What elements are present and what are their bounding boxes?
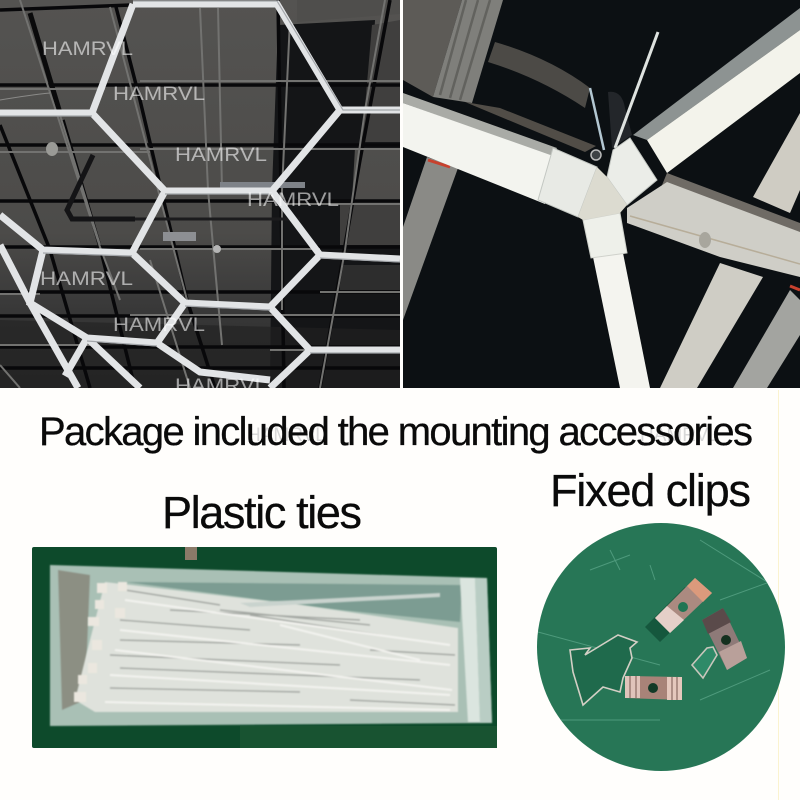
label: fixed clips: Fixed clips [550,465,751,516]
heading: package contents: Package included the mounting accessories [39,410,753,454]
steel studs [433,0,503,103]
decorative edge line [778,390,779,800]
photo: fixed clips on green mat [537,523,785,771]
plastic bag [50,565,492,726]
faint ghost watermarks behind heading: HAMRVL [640,425,719,446]
faint ghost watermarks behind heading [247,425,719,446]
watermarks: HAMRVL [113,314,205,336]
watermarks: HAMRVL [42,38,133,60]
white hexagon tube network [0,4,400,388]
bottom tube [593,253,650,388]
photo: close-up of Y connector joint [403,0,800,388]
light background beams [660,263,763,388]
grey background panel and curved beam [403,0,462,97]
clip: right copper [702,608,747,670]
main horizontal beam [660,173,800,235]
watermarks: HAMRVL [40,268,133,290]
clip: top copper [645,578,712,642]
photo: bag of plastic ties [32,547,497,748]
photo: hexagon lights on ceiling grid [0,0,400,388]
faint ghost watermarks behind heading: HAMRVL [247,425,326,446]
watermarks [40,38,339,397]
bundle of cable ties [74,582,458,712]
label: plastic ties: Plastic ties [162,487,362,538]
clip: open spring clip right [692,647,717,678]
watermarks: HAMRVL [113,83,205,105]
clip: open spring clip left [570,635,637,705]
clear Y connector [538,138,657,258]
clip: bottom copper [625,676,682,700]
grid of ceiling bars [0,0,400,388]
watermarks: HAMRVL [247,189,339,211]
left tube [403,93,557,157]
watermarks: HAMRVL [175,144,267,166]
cable ties [590,88,604,150]
right tube [633,8,800,140]
